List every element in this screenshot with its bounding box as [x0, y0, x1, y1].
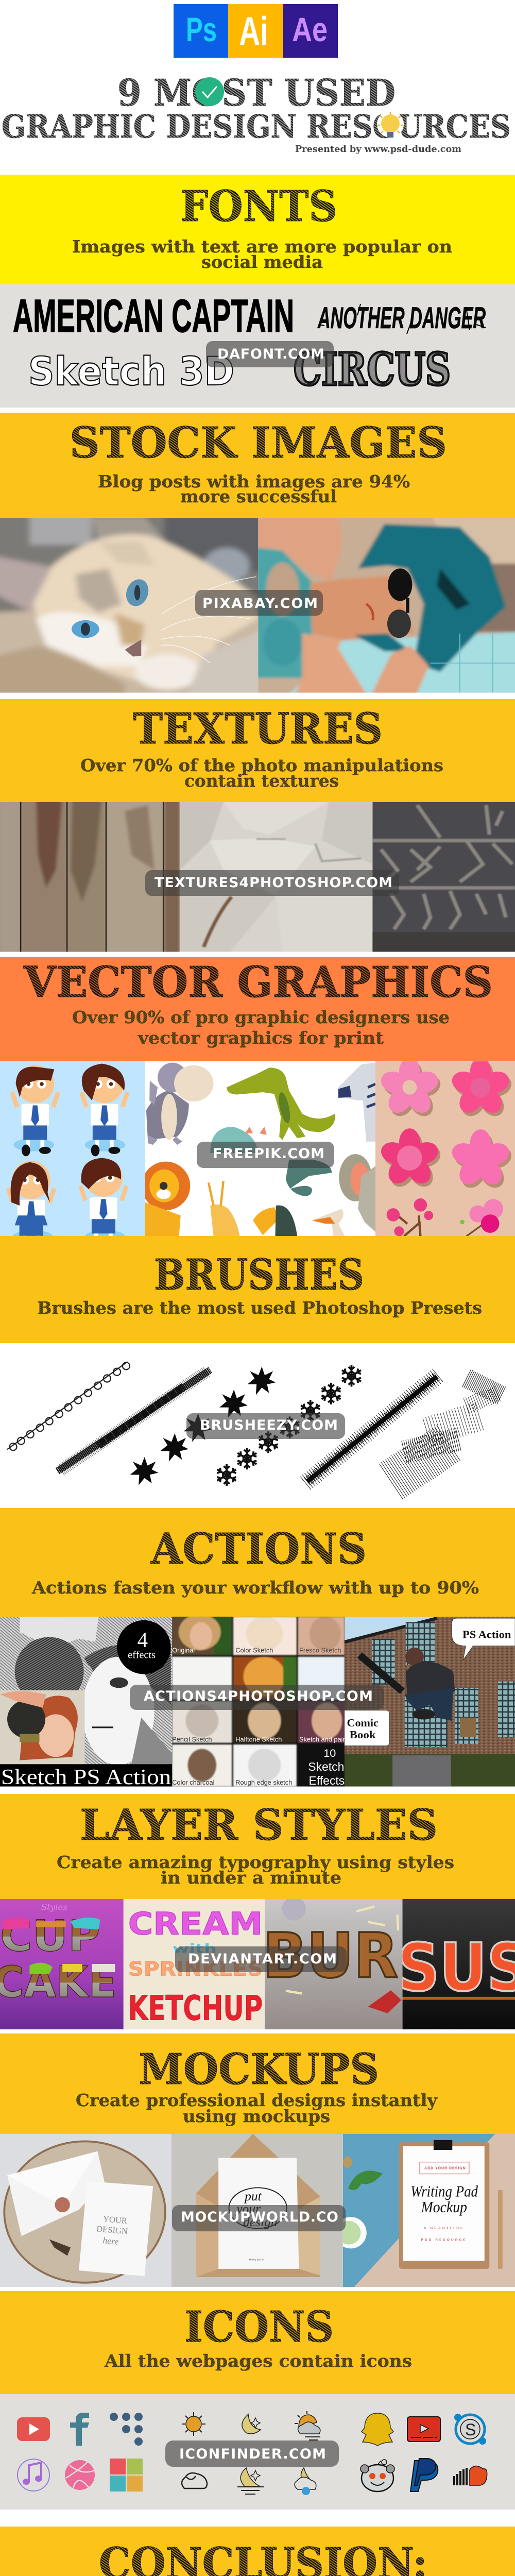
- panel: action images: [0, 1614, 515, 1789]
- photo: tire tracks: [372, 802, 515, 952]
- title: 9 MOST USED: [117, 71, 396, 114]
- panel: icons heading: [0, 2291, 515, 2394]
- panel: mockups heading: [0, 2033, 515, 2134]
- mockup: wood slice stationery: YOUR: [102, 2214, 128, 2226]
- photo: sketch action: [0, 1617, 172, 1789]
- photo: comic book action: Book: [350, 1728, 376, 1741]
- icon: moon over water: [237, 2468, 264, 2494]
- mockup: wood slice stationery: [0, 2134, 171, 2287]
- label: pixabay.com: [195, 590, 323, 616]
- mockup: clipboard: Writing Pad: [410, 2183, 478, 2200]
- photo: sketch effects grid: Fresco Sketch: [299, 1646, 341, 1654]
- panel: vector graphics heading: Over 90% of pro graphic designers use: [72, 1007, 450, 1027]
- mockup: clipboard: PSD RESOURCE: [421, 2239, 466, 2242]
- sample: cream sprinkles style: CREAM: [128, 1906, 263, 1942]
- sample: cream sprinkles style: SPRINKLES: [128, 1958, 263, 1980]
- label: deviantart.com: DEVIANTART.COM: [188, 1951, 337, 1967]
- icon: check badge: [195, 77, 224, 106]
- sample: burger style: BUR: [263, 1921, 398, 1992]
- panel: icons heading: All the webpages contain icons: [104, 2351, 412, 2371]
- photo: sketch effects grid: Rough edge sketch: [235, 1778, 292, 1786]
- panel: font samples: CIRCUS: [294, 344, 451, 396]
- panel: layer styles heading: LAYER STYLES: [80, 1801, 438, 1850]
- icon: skype: [454, 2414, 486, 2445]
- icon: reddit: [360, 2460, 394, 2492]
- panel: layer styles heading: in under a minute: [161, 1868, 341, 1888]
- software logos: [174, 4, 338, 58]
- software logos: Ae: [292, 10, 328, 48]
- panel: stock images heading: more successful: [180, 486, 337, 506]
- icon: dribbble: [65, 2460, 95, 2490]
- panel: actions heading: [0, 1508, 515, 1617]
- panel: brushes heading: Brushes are the most used Photoshop Presets: [37, 1298, 482, 1318]
- panel: mockups heading: Create professional designs instantly: [76, 2090, 438, 2110]
- mockup: wood slice stationery: here: [102, 2235, 119, 2247]
- mockup: kraft envelope card: your: [235, 2201, 261, 2216]
- label: iconfinder.com: ICONFINDER.COM: [179, 2446, 326, 2462]
- sample: cupcake style: CUP: [0, 1911, 100, 1961]
- mockup: kraft envelope card: design: [243, 2214, 278, 2229]
- panel: font samples: CIRCUS: [294, 344, 451, 396]
- brush: chalk stroke: [58, 1370, 210, 1471]
- panel: icon samples: [0, 2394, 515, 2510]
- software logos: Ps: [186, 10, 217, 48]
- panel: layer styles heading: [0, 1794, 515, 1899]
- photo: sketch effects grid: Color charcoal: [172, 1778, 214, 1786]
- panel: layer styles heading: Create amazing typography using styles: [57, 1852, 454, 1872]
- panel: font samples: AMERICAN CAPTAIN: [13, 291, 294, 342]
- photo: sketch action: 4: [138, 1629, 148, 1652]
- photo: wood planks: [0, 796, 180, 958]
- label: pixabay.com: PIXABAY.COM: [202, 596, 318, 612]
- photo: comic book action: PS Action: [462, 1628, 511, 1640]
- photo: kitten: [0, 518, 259, 692]
- panel: vector graphics heading: [0, 957, 515, 1061]
- photo: sketch effects grid: Original: [172, 1646, 195, 1654]
- photo: sketch effects grid: [172, 1614, 348, 1787]
- software logos: Ai: [239, 8, 268, 54]
- icon: moon and snow cloud: [295, 2468, 316, 2495]
- label: textures4photoshop.com: TEXTURES4PHOTOSHOP.COM: [154, 875, 392, 891]
- icon: youtube: [17, 2417, 50, 2441]
- photo: sketch effects grid: Effects: [309, 1774, 345, 1787]
- icon: music: [18, 2459, 49, 2491]
- panel: conclusion heading: [0, 2527, 515, 2576]
- icon: skype: S: [465, 2420, 476, 2439]
- panel: textures heading: [0, 699, 515, 802]
- title: Presented by www.psd-dude.com: [295, 144, 461, 155]
- mockup: wood slice stationery: DESIGN: [96, 2224, 128, 2236]
- panel: brushes heading: BRUSHES: [154, 1250, 364, 1300]
- panel: stock images heading: STOCK IMAGES: [70, 418, 447, 468]
- photo: sketch effects grid: Color Sketch: [235, 1646, 273, 1654]
- illustration: flowers: [375, 1058, 515, 1236]
- sample: cupcake style: Styles: [41, 1902, 67, 1912]
- panel: stock photos: [0, 510, 515, 702]
- mockup: clipboard: ADD YOUR DESIGN: [424, 2167, 466, 2171]
- icon: soundcloud: [454, 2466, 487, 2485]
- icon: snapchat: [362, 2413, 393, 2446]
- label: mockupworld.co: MOCKUPWORLD.CO: [181, 2209, 338, 2225]
- title: [2, 71, 511, 155]
- icon: video player: [407, 2417, 440, 2442]
- panel: brushes heading: [0, 1236, 515, 1343]
- illustration: school kids: [0, 1061, 145, 1252]
- label: actions4photoshop.com: ACTIONS4PHOTOSHOP.COM: [144, 1688, 373, 1704]
- label: freepik.com: FREEPIK.COM: [213, 1146, 324, 1162]
- sample: cream sprinkles style: [124, 1899, 265, 2029]
- panel: stock images heading: Blog posts with images are 94%: [98, 471, 410, 492]
- panel: vector graphics heading: VECTOR GRAPHICS: [23, 958, 493, 1007]
- panel: mockups heading: using mockups: [183, 2106, 330, 2126]
- sample: cream sprinkles style: KETCHUP: [128, 1988, 263, 2028]
- mockup: clipboard: A BEAUTIFUL: [424, 2227, 462, 2230]
- panel: fonts heading: social media: [201, 252, 323, 272]
- panel: textures heading: TEXTURES: [133, 704, 383, 754]
- panel: textures heading: Over 70% of the photo manipulations: [80, 755, 443, 775]
- sample: cupcake style: [0, 1899, 124, 2029]
- panel: fonts heading: [0, 175, 515, 284]
- panel: vector images: [0, 1061, 515, 1236]
- mockup: kraft envelope card: put: [244, 2189, 262, 2204]
- photo: sketch effects grid: Sketch: [308, 1760, 344, 1773]
- photo: sketch action: effects: [128, 1649, 156, 1660]
- panel: fonts heading: FONTS: [180, 182, 337, 231]
- panel: brush strokes: [7, 1362, 503, 1486]
- sample: cream sprinkles style: with: [173, 1941, 217, 1956]
- photo: sketch action: Sketch PS Action: [1, 1765, 171, 1789]
- panel: actions heading: ACTIONS: [150, 1524, 367, 1574]
- panel: stock images heading: [0, 413, 515, 518]
- label: dafont.com: DAFONT.COM: [217, 346, 324, 362]
- photo: woman with teal hair: [258, 518, 515, 692]
- brush: curly spiral: [7, 1362, 130, 1450]
- panel: font samples: Sketch 3D: [28, 348, 234, 394]
- icon: dot grid: [110, 2413, 143, 2446]
- panel: texture photos: [0, 796, 515, 958]
- panel: textures heading: contain textures: [184, 771, 339, 791]
- label: deviantart.com: [175, 1946, 347, 1972]
- photo: sketch effects grid: Sketch and paint: [299, 1735, 348, 1743]
- mockup: clipboard: [335, 2134, 515, 2287]
- panel: layer style samples: [0, 1897, 515, 2029]
- panel: fonts heading: Images with text are more popular on: [72, 236, 452, 257]
- photo: comic book action: [338, 1617, 515, 1787]
- brush: snowflakes: [217, 1365, 361, 1486]
- icon: microsoft tiles: [110, 2459, 143, 2492]
- icon: paypal: [410, 2459, 438, 2492]
- icon: clouds: [182, 2473, 207, 2488]
- panel: font samples: [0, 284, 515, 408]
- photo: crumpled paper: [180, 802, 372, 952]
- brush: hatch scribble: [391, 1378, 503, 1482]
- sample: sushi style: [398, 1899, 515, 2029]
- label: brusheezy.com: BRUSHEEZY.COM: [200, 1417, 338, 1433]
- mockup: kraft envelope card: MARIE SMITH: [249, 2258, 264, 2261]
- photo: sketch effects grid: 10: [323, 1747, 336, 1759]
- icon: crescent moon: [242, 2414, 261, 2434]
- brush: spiky line: [305, 1375, 438, 1483]
- panel: mockup images: [0, 2134, 515, 2287]
- panel: actions heading: Actions fasten your workflow with up to 90%: [31, 1578, 479, 1598]
- label: brusheezy.com: [186, 1413, 345, 1439]
- label: actions4photoshop.com: [130, 1685, 384, 1710]
- brush: maple leaves: [130, 1367, 276, 1485]
- mockup: clipboard: Mockup: [421, 2198, 467, 2216]
- photo: sketch effects grid: Halftone Sketch: [235, 1735, 282, 1743]
- mockup: kraft envelope card: [171, 2134, 343, 2287]
- panel: icons heading: ICONS: [184, 2302, 334, 2352]
- icon: sun behind cloud: [295, 2411, 320, 2440]
- photo: comic book action: Comic: [347, 1717, 379, 1729]
- label: freepik.com: [197, 1142, 334, 1168]
- label: dafont.com: [206, 341, 334, 367]
- label: mockupworld.co: [172, 2205, 346, 2231]
- icon: sun: [182, 2412, 205, 2436]
- illustration: cartoon animals: [142, 1061, 375, 1236]
- panel: vector graphics heading: vector graphics for print: [138, 1028, 384, 1048]
- label: textures4photoshop.com: [145, 870, 399, 896]
- panel: mockups heading: MOCKUPS: [139, 2045, 379, 2094]
- photo: sketch effects grid: Pencil Sketch: [172, 1735, 212, 1743]
- icon: light bulb: [377, 111, 404, 138]
- sample: burger style: [263, 1897, 402, 2029]
- icon: facebook: [70, 2413, 89, 2446]
- label: iconfinder.com: [165, 2441, 339, 2467]
